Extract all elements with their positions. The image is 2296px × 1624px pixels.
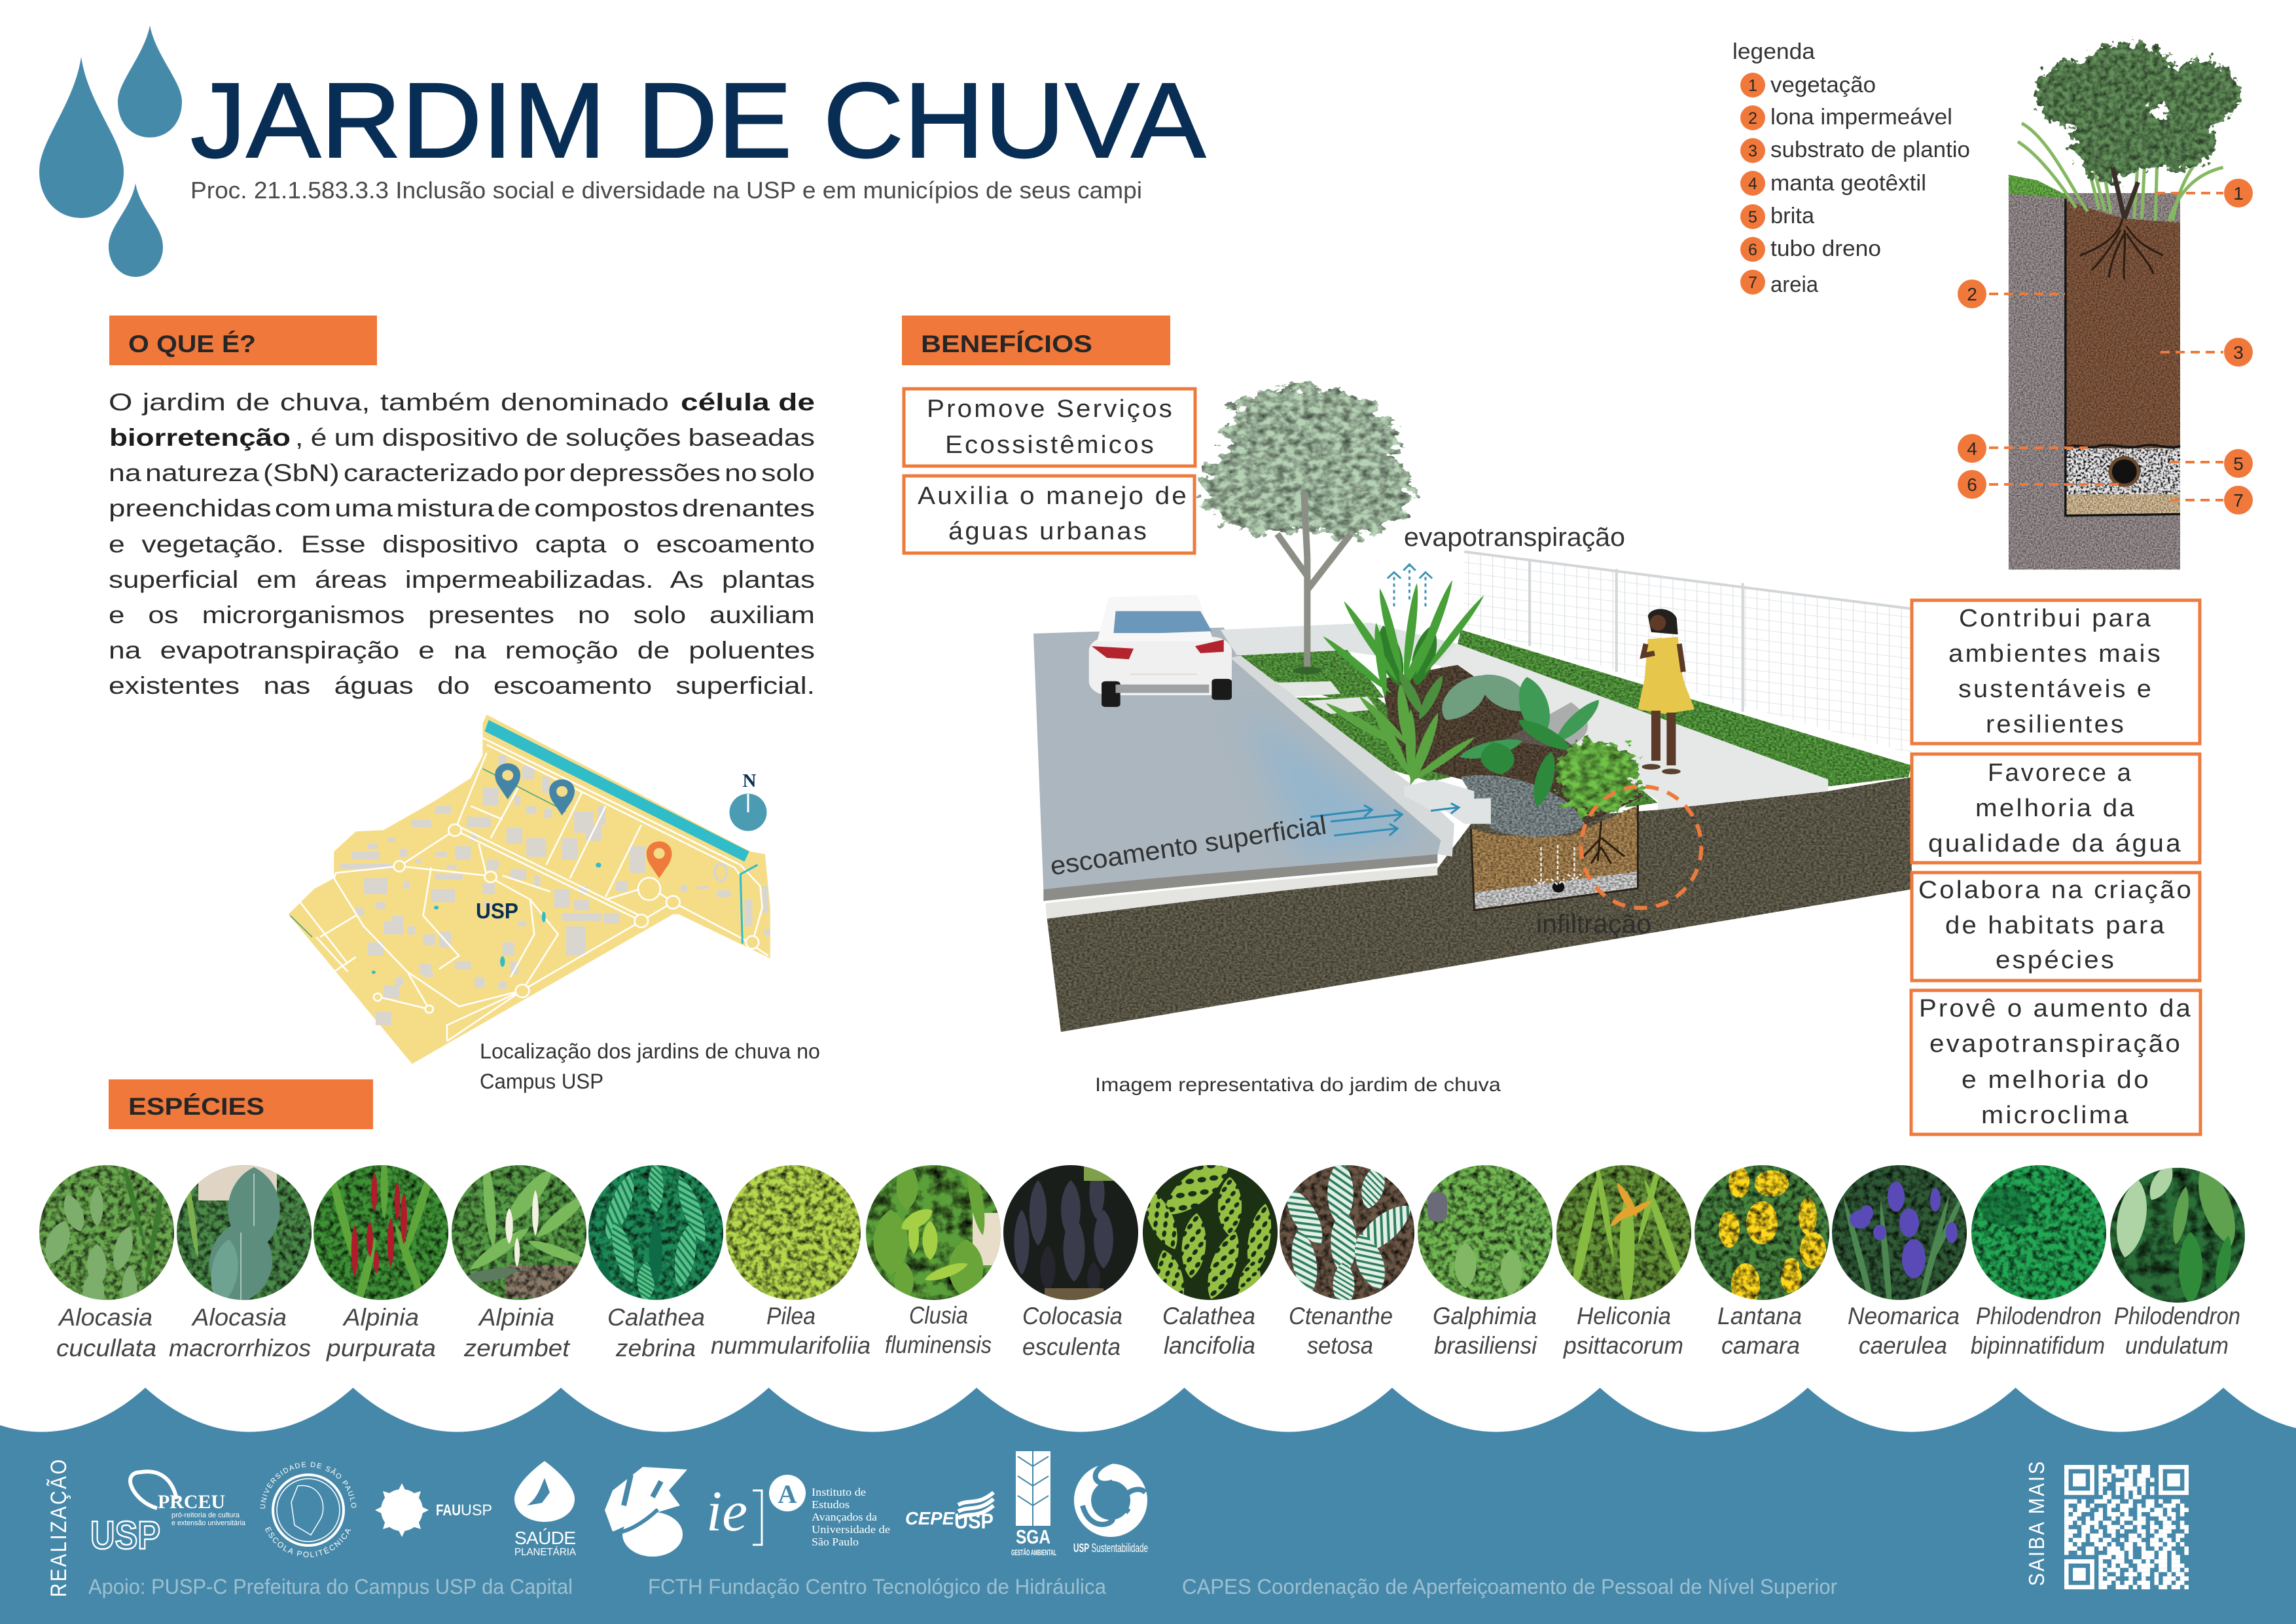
photo: Neomarica caerulea (1832, 1165, 1967, 1300)
benefit: ambientes sustentáveis: ambientes mais (1948, 640, 2162, 668)
photo: Alocasia macrorrhizos (176, 1164, 312, 1307)
legend: substrato de plantio (1770, 137, 1970, 162)
support line: Apoio: PUSP-C Prefeitura do Campus USP da Capital (88, 1575, 573, 1598)
benefit: manejo de águas: Auxilia o manejo de (918, 482, 1189, 510)
scene: woman (1638, 609, 1695, 774)
logo: IEA USP: Universidade de (812, 1523, 890, 1536)
support line: FCTH Fundação Centro Tecnológico de Hidráulica (648, 1575, 1106, 1598)
photo: Lantana camara (1694, 1164, 1830, 1307)
logo: IEA USP: Avançados da (812, 1511, 877, 1523)
species names: brasiliensi (1434, 1332, 1538, 1359)
photo: Pilea nummulariifolia (725, 1164, 861, 1301)
text block: definition: O jardim de chuva, também denominado (109, 389, 669, 416)
species names: Ctenanthe (1289, 1303, 1393, 1329)
species names: esculenta (1022, 1333, 1121, 1360)
arrows: infiltration (1534, 845, 1581, 884)
benefit: serviços ecossistêmicos: Promove Serviços (927, 395, 1174, 423)
text block: definition: na evapotranspiração e na remoção de poluentes (109, 637, 815, 664)
species names: caerulea (1859, 1332, 1947, 1359)
logo: IEA USP: A (778, 1479, 797, 1509)
arrows: surface runoff (1310, 803, 1459, 835)
species names: fluminensis (885, 1331, 992, 1358)
logo: FAU USP: FAU (436, 1502, 461, 1519)
scene: lawn (1237, 650, 1658, 808)
species names: zebrina (615, 1335, 696, 1362)
profile: grass (2009, 175, 2066, 198)
profile: drain pipe (2109, 456, 2140, 487)
legend: 6 (1748, 241, 1757, 259)
benefit: qualidade da água (1912, 754, 2200, 863)
photo: Philodendron undulatum (2109, 1161, 2246, 1304)
photo: Alocasia cucullata (39, 1165, 174, 1300)
callouts: numbered layers: 2 (1967, 284, 1977, 304)
logo: CEPE USP (905, 1492, 994, 1533)
text block: definition (109, 389, 815, 699)
legend (1732, 39, 1970, 297)
callout: dashed detail ring (1581, 786, 1701, 908)
title: JARDIM DE CHUVA (190, 60, 1206, 180)
callouts: numbered layers: 3 (2233, 342, 2244, 363)
logo: SGA: SGA (1016, 1526, 1050, 1548)
legend: 4 (1748, 175, 1757, 193)
species names: camara (1721, 1332, 1800, 1359)
QR code (2064, 1467, 2189, 1587)
icon: north compass: N (743, 770, 757, 791)
scene: pond (1461, 775, 1585, 837)
logo: Escola Politécnica: ESCOLA POLITÉCNICA (265, 1526, 351, 1557)
text block: definition: , é um dispositivo de soluções baseadas (295, 424, 815, 451)
species names: Philodendron (1976, 1303, 2102, 1329)
legend: tubo dreno (1770, 236, 1881, 261)
benefit: serviços ecossistêmicos: Ecossistêmicos (945, 431, 1156, 459)
species names: zerumbet (463, 1335, 571, 1362)
species names (56, 1302, 2240, 1362)
benefit: microclima: evapotranspiração (1929, 1030, 2182, 1058)
logo: shell (605, 1467, 687, 1557)
scene: sidewalk (1437, 644, 1828, 810)
pin: orange (647, 841, 672, 878)
profile: native soil (2009, 193, 2180, 569)
photo: Alpinia zerumbet (451, 1157, 591, 1301)
species names: bipinnatifidum (1971, 1332, 2105, 1359)
scene: pit cross section (1471, 805, 1638, 911)
text block: definition: e vegetação. Esse dispositivo capta o escoamento (109, 531, 815, 558)
benefit: manejo de águas: águas urbanas (948, 518, 1149, 545)
legend: manta geotêxtil (1770, 171, 1926, 196)
benefit: ambientes sustentáveis: Contribui para (1959, 605, 2153, 632)
benefit: habitats: Colabora na criação (1918, 876, 2193, 904)
photo: Clusia fluminensis (866, 1165, 1001, 1300)
species names: Galphimia (1433, 1303, 1537, 1329)
scene: road asphalt (1033, 628, 1451, 919)
species names: Alocasia (191, 1304, 287, 1331)
benefit: qualidade da água: melhoria da (1975, 795, 2136, 822)
species names: macrorrhizos (169, 1335, 311, 1362)
photo: Calathea lancifolia (1143, 1165, 1278, 1300)
logo: FAU USP: USP (461, 1502, 492, 1519)
scene: inlet (1404, 780, 1491, 824)
map caption (480, 1039, 820, 1093)
species names: Pilea (766, 1303, 816, 1329)
profile: planting substrate (2066, 200, 2180, 448)
profile: shrub foliage (2036, 43, 2240, 182)
support line: CAPES Coordenação de Aperfeiçoamento de Pessoal de Nível Superior (1182, 1575, 1837, 1598)
logo: IEA USP: Estudos (812, 1498, 850, 1511)
callouts: numbered layers: 4 (1967, 439, 1977, 459)
icon: north compass (729, 770, 767, 831)
species names: purpurata (326, 1335, 436, 1362)
support line (88, 1575, 1837, 1598)
species names: Calathea (607, 1304, 705, 1331)
photo: Ctenanthe setosa (1280, 1165, 1414, 1300)
logo: PRCEU USP: e extensão universitária (171, 1519, 246, 1527)
subtitle: Proc. 21.1.583.3.3 Inclusão social e diversidade na USP e em municípios de seus campi (190, 177, 1142, 204)
photo: Galphimia brasiliensis (1417, 1164, 1553, 1301)
scene: curb (1230, 655, 1454, 857)
species names: Alpinia (478, 1304, 554, 1331)
logo: IEA USP: São Paulo (812, 1536, 859, 1548)
species names: Clusia (909, 1302, 968, 1329)
species names: psittacorum (1563, 1332, 1683, 1359)
benefit: habitats: de habitats para (1945, 912, 2166, 939)
label: evapotranspiração: evapotranspiração (1404, 523, 1625, 552)
footer band with scallops (0, 1388, 2296, 1624)
legend: 7 (1748, 274, 1757, 292)
heading: Espécies (109, 1079, 373, 1129)
profile: roots (2080, 219, 2163, 280)
callouts: numbered layers: 6 (1967, 475, 1977, 495)
heading: O que é (109, 316, 377, 365)
legend: brita (1770, 204, 1814, 228)
legend: legenda (1732, 39, 1815, 64)
logo: SGA: GESTÃO AMBIENTAL (1011, 1547, 1056, 1557)
label: realização: REALIZAÇÃO (46, 1458, 71, 1597)
benefit: microclima (1911, 990, 2200, 1134)
text block: definition: preenchidas com uma mistura de compostos drenantes (109, 495, 815, 522)
scene: back pavement and grass (1221, 623, 1912, 786)
map caption: Localização dos jardins de chuva no (480, 1039, 820, 1063)
heading: Espécies: ESPÉCIES (128, 1093, 264, 1120)
photo: Calathea zebrina (588, 1161, 724, 1301)
logo: CEPE USP: USP (954, 1509, 994, 1533)
scene: garden plants (1319, 579, 1639, 863)
scene: car (1089, 595, 1232, 707)
legend: lona impermeável (1770, 105, 1952, 130)
photo: Alpinia purpurata (314, 1165, 448, 1300)
label: infiltração: infiltração (1536, 910, 1651, 939)
profile: grass blades (2018, 123, 2223, 221)
text block: definition: e os microrganismos presentes no solo auxiliam (109, 602, 815, 628)
species names: cucullata (56, 1335, 156, 1362)
map: USP campus (289, 715, 770, 1064)
scene: tree (1200, 387, 1411, 674)
legend: 2 (1748, 109, 1757, 128)
benefit: microclima: Provê o aumento da (1919, 995, 2193, 1022)
logo: Saúde Planetária (514, 1461, 576, 1558)
logo: FAU USP (375, 1483, 492, 1537)
text block: definition: na natureza (SbN) caracterizado por depressões no solo (109, 460, 815, 486)
text block: definition: célula de (681, 389, 815, 416)
species names: setosa (1307, 1332, 1373, 1359)
map caption: Campus USP (480, 1070, 603, 1093)
text block: definition: superficial em áreas impermeabilizadas. As plantas (109, 566, 815, 593)
text block: definition: existentes nas águas do escoamento superficial. (109, 672, 815, 699)
logo: IEA USP: ie (706, 1480, 747, 1543)
benefit: ambientes sustentáveis: resilientes (1986, 711, 2126, 738)
heading: Benefícios: BENEFÍCIOS (921, 331, 1092, 357)
legend: 3 (1748, 142, 1757, 160)
benefit: qualidade da água: qualidade da água (1928, 830, 2183, 857)
legend: areia (1770, 272, 1818, 297)
benefit: serviços ecossistêmicos (904, 389, 1195, 466)
logo: SGA (1011, 1451, 1056, 1557)
profile: sand (2066, 494, 2180, 516)
benefit: manejo de águas (904, 476, 1194, 553)
logo: PRCEU USP: pró-reitoria de cultura (171, 1511, 240, 1519)
species names: Alpinia (342, 1304, 419, 1331)
scene: soil block (1047, 777, 1912, 1032)
legend: 1 (1748, 77, 1757, 95)
logo: USP Sustentabilidade (1073, 1461, 1148, 1555)
species names: Philodendron (2114, 1303, 2240, 1329)
benefit: habitats: espécies (1996, 947, 2116, 974)
scene: pavers (1274, 681, 1377, 714)
logo: CEPE USP: CEPE (905, 1508, 955, 1528)
pin: blue 1 (495, 763, 520, 799)
species names: undulatum (2125, 1332, 2229, 1359)
benefit: ambientes sustentáveis (1912, 600, 2200, 744)
heading: Benefícios (902, 316, 1170, 365)
callouts: numbered layers: 7 (2233, 490, 2244, 511)
map label: USP: USP (476, 899, 518, 923)
logo: Escola Politécnica: UNIVERSIDADE DE SÃO PAULO (260, 1462, 356, 1509)
diagram: soil profile (2009, 43, 2240, 569)
logo: USP Sustentabilidade: USP Sustentabilidade (1073, 1542, 1148, 1555)
species names: Neomarica (1848, 1303, 1960, 1329)
pin: blue 2 (549, 780, 575, 816)
logo: Saúde Planetária: PLANETÁRIA (514, 1545, 576, 1558)
benefit: ambientes sustentáveis: sustentáveis e (1958, 676, 2153, 703)
legend: vegetação (1770, 73, 1876, 98)
logo: PRCEU USP (90, 1471, 246, 1557)
photo: Philodendron bipinnatifidum (1971, 1164, 2107, 1301)
species names: Alocasia (58, 1304, 152, 1331)
species names: Colocasia (1022, 1303, 1122, 1329)
scene caption: Imagem representativa do jardim de chuva (1095, 1074, 1501, 1096)
legend: 5 (1748, 208, 1757, 226)
species names: Lantana (1717, 1303, 1802, 1329)
callouts: numbered layers: 1 (2233, 183, 2244, 204)
heading: O que é: O QUE É? (128, 331, 256, 357)
species names: nummularifoliia (711, 1332, 870, 1359)
logo: PRCEU USP: USP (90, 1513, 160, 1557)
illustration: rain garden scene (1033, 387, 1912, 1032)
photo: Heliconia psittacorum (1556, 1165, 1691, 1300)
species names: Calathea (1162, 1303, 1255, 1329)
icon: rain drops (39, 26, 182, 277)
logo: IEA USP: Instituto de (812, 1486, 866, 1498)
species names: lancifolia (1164, 1332, 1255, 1359)
logo: IEA USP (706, 1475, 890, 1548)
callouts: numbered layers (1958, 179, 2253, 514)
profile: liner (2066, 198, 2180, 516)
benefit: qualidade da água: Favorece a (1988, 759, 2133, 787)
species names: Heliconia (1577, 1303, 1671, 1329)
text block: definition: biorretenção (109, 424, 291, 451)
photo: Colocasia esculenta (1003, 1164, 1139, 1301)
label: saiba mais: SAIBA MAIS (2024, 1460, 2049, 1586)
logo: Escola Politécnica (260, 1462, 356, 1557)
benefit: microclima: microclima (1981, 1102, 2130, 1129)
benefit: habitats (1912, 873, 2200, 981)
profile: trunk (2113, 168, 2138, 219)
logo: Saúde Planetária: SAÚDE (514, 1528, 576, 1548)
scene: mulch bed (1381, 665, 1645, 829)
arrows: evapotranspiration (1388, 564, 1432, 606)
logo: PRCEU USP: PRCEU (158, 1491, 225, 1513)
profile: gravel (2066, 448, 2180, 494)
scene: fence (1464, 552, 1912, 753)
callouts: numbered layers: 5 (2233, 454, 2244, 474)
benefit: microclima: e melhoria do (1962, 1066, 2151, 1094)
label: escoamento superficial: escoamento superficial (1049, 811, 1329, 881)
